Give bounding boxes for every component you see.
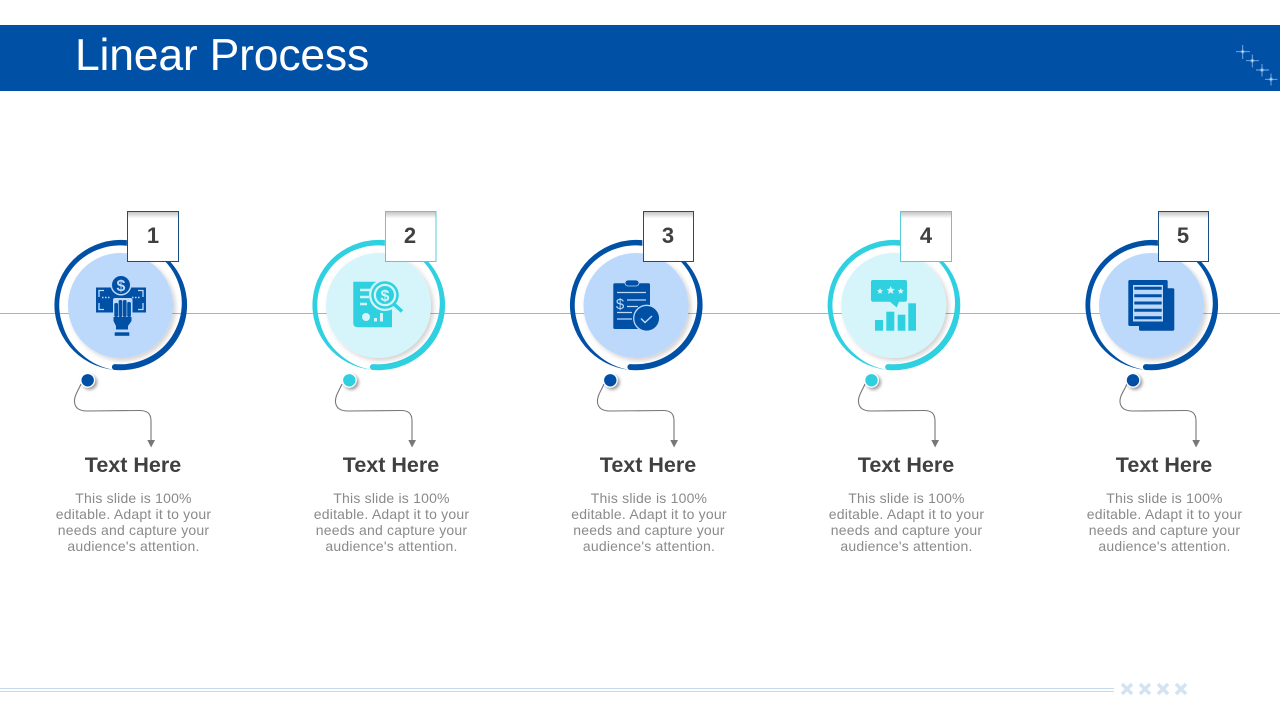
step 1 [54,212,211,554]
body text [829,490,984,554]
body text: editable. Adapt it to your [56,506,211,522]
ring [570,240,703,370]
number box [386,212,436,262]
heading: Text Here [1116,453,1212,477]
body text: audience's attention. [583,538,715,554]
ring [54,240,187,370]
body text [56,490,211,554]
body text: This slide is 100% [333,490,450,506]
number box: 3 [662,223,674,248]
footer decoration [0,684,1186,694]
number box: 4 [920,223,933,248]
body text: This slide is 100% [75,490,192,506]
heading: Text Here [343,453,439,477]
body text: editable. Adapt it to your [314,506,469,522]
disc [68,253,173,358]
body text: needs and capture your [316,522,467,538]
body text: editable. Adapt it to your [571,506,727,522]
connector arrow [597,384,678,448]
dot [81,374,94,387]
icon: sparkles [1236,45,1278,86]
icon: money in hand: $ [117,278,126,295]
icon: clipboard check [613,280,660,331]
number box [128,212,178,262]
step 3 [570,212,727,554]
dot [865,374,878,387]
ring [312,240,445,370]
body text: audience's attention. [325,538,458,554]
dot [604,374,617,387]
body text: editable. Adapt it to your [829,506,984,522]
icon: financial report search [353,279,402,327]
icon: financial report search: $ [381,288,390,305]
body text: audience's attention. [1098,538,1231,554]
header band [0,25,1280,91]
body text: needs and capture your [1089,522,1240,538]
icon: documents [1128,280,1174,331]
connector arrow [335,384,416,448]
icon: rating chart [871,280,916,331]
body text: This slide is 100% [591,490,707,506]
connector arrow [858,384,939,448]
disc [326,253,431,358]
body text: audience's attention. [67,538,200,554]
body text: needs and capture your [831,522,982,538]
number box: 5 [1177,223,1189,248]
disc [584,253,688,358]
body text: This slide is 100% [848,490,965,506]
body text: This slide is 100% [1106,490,1223,506]
ring [1085,240,1218,370]
body text [571,490,727,554]
body text [314,490,469,554]
body text [1087,490,1242,554]
body text: audience's attention. [840,538,973,554]
icon: clipboard check: $ [616,296,625,313]
body text: needs and capture your [573,522,725,538]
disc [841,253,946,358]
step 5 [1085,212,1242,554]
body text: needs and capture your [58,522,209,538]
horizontal timeline line [0,312,1280,314]
title: Linear Process [75,31,369,80]
dot [1126,374,1140,387]
step 2 [312,212,469,554]
ring [828,240,960,370]
dot [342,374,356,387]
step 4 [828,212,984,554]
heading: Text Here [858,453,954,477]
number box [644,212,694,262]
heading: Text Here [85,453,181,477]
number box [900,212,952,262]
number box [1158,212,1208,262]
disc [1099,253,1204,358]
number box: 1 [147,223,159,248]
connector arrow [74,384,155,448]
heading: Text Here [600,453,696,477]
connector arrow [1120,384,1200,448]
body text: editable. Adapt it to your [1087,506,1242,522]
icon: money in hand [96,274,146,336]
number box: 2 [404,223,416,248]
